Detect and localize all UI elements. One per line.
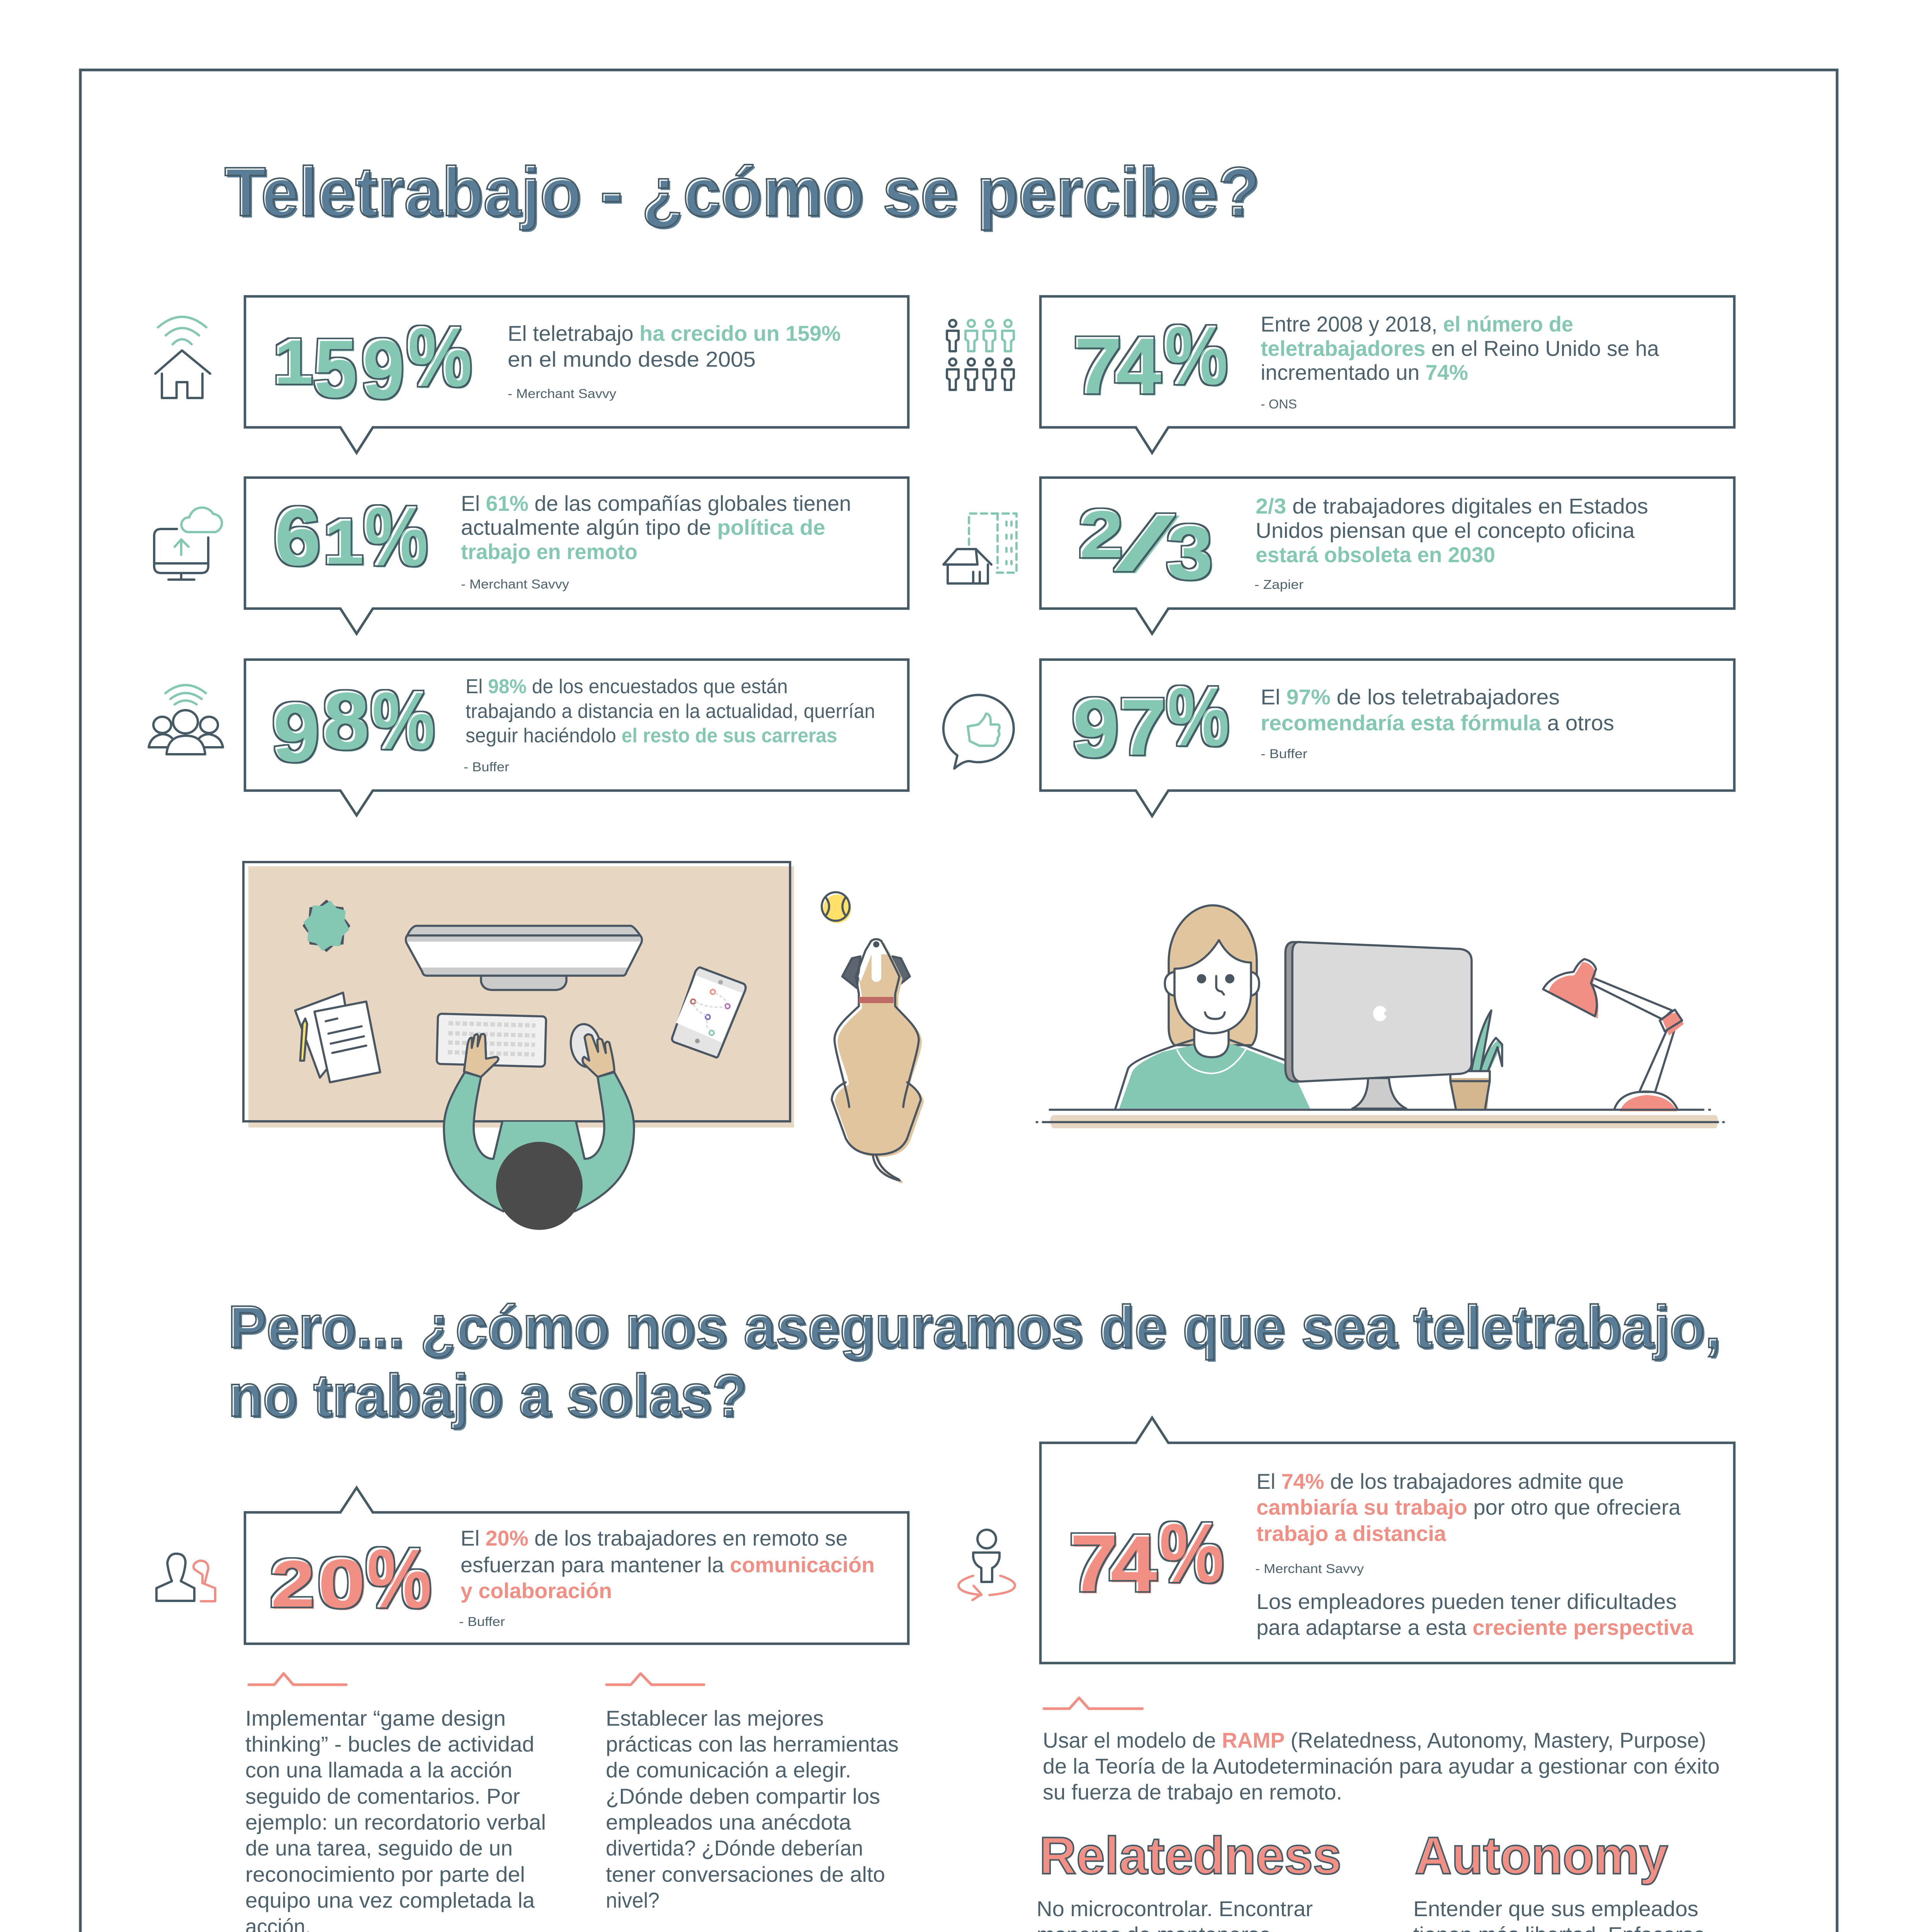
text block: trabajo en remoto — [461, 539, 637, 564]
face — [1175, 940, 1251, 1033]
stat: 159%: 9 — [364, 324, 406, 417]
text block: 2/3 de trabajadores digitales en Estados — [1256, 494, 1648, 518]
neck — [1194, 1028, 1229, 1057]
stat: 97%: 9 — [1074, 684, 1120, 776]
text block — [508, 321, 841, 401]
stat: 97%: 9 — [1072, 682, 1118, 774]
text block: Unidos piensan que el concepto oficina — [1256, 518, 1635, 543]
text block — [464, 675, 875, 774]
text block: seguir haciéndolo el resto de sus carreras — [466, 724, 837, 747]
block: Relatedness: Relatedness — [1039, 1826, 1341, 1885]
panel: 74% cambiaría — [1040, 1418, 1734, 1663]
stat: 98%: 8 — [322, 675, 369, 765]
text block — [1261, 312, 1659, 411]
tablet — [672, 968, 746, 1058]
title: Teletrabajo - ¿cómo se percibe? — [224, 153, 1260, 231]
text block: game design: de una tarea, seguido de un — [245, 1836, 513, 1860]
stat: 61%: 6 — [275, 492, 322, 583]
text block: trabajo a distancia — [1256, 1521, 1446, 1546]
panel: 61% — [245, 478, 908, 634]
text block: game design: con una llamada a la acción — [245, 1758, 512, 1782]
stat: 61% — [274, 489, 429, 584]
text block: El 97% de los teletrabajadores — [1261, 685, 1560, 709]
stat: 159%: 9 — [362, 322, 404, 415]
text block: mejores prácticas: ¿Dónde deben compartir los — [606, 1784, 880, 1808]
stat: 20%: % — [368, 1533, 433, 1626]
stat: 74%: 4 — [1115, 321, 1161, 410]
icon: cloud upload monitor — [154, 508, 222, 580]
text block: mejores prácticas: divertida? ¿Dónde deberían — [606, 1836, 863, 1860]
heading: section two — [228, 1293, 1723, 1431]
ears — [1165, 972, 1259, 996]
torso — [1115, 1039, 1310, 1109]
icon: group of people — [947, 320, 1014, 390]
text block: - Buffer — [1261, 747, 1307, 761]
stat: 97% — [1072, 669, 1231, 776]
stat: 74% — [1073, 309, 1229, 412]
stat: 61%: 1 — [325, 508, 365, 578]
stat: 159%: 1 — [273, 326, 313, 396]
stat: 74%: 4 — [1117, 323, 1163, 412]
text block: recomendaría esta fórmula a otros — [1261, 711, 1614, 735]
stat: 74%: 7 — [1073, 321, 1122, 410]
text block: RAMP intro — [1043, 1728, 1720, 1804]
text block: game design: equipo una vez completada la — [245, 1888, 535, 1912]
stat: 74%: 7 — [1069, 1517, 1117, 1608]
block: Autonomy — [1413, 1826, 1705, 1932]
text block: mejores prácticas: nivel? — [606, 1888, 659, 1912]
icon: thumbs up bubble — [943, 695, 1014, 769]
stat: 98%: % — [373, 676, 436, 767]
stat: 98%: 8 — [324, 677, 371, 767]
stat: 159%: 1 — [275, 328, 314, 398]
text block: game design: thinking” - bucles de actividad — [245, 1732, 534, 1756]
text block: - Merchant Savvy — [508, 386, 617, 401]
hair — [1169, 905, 1257, 1045]
stat: 2/3: 2 — [1081, 498, 1125, 573]
icon: house and office — [943, 514, 1016, 583]
keyboard — [437, 1014, 546, 1067]
stat: 98%: % — [371, 674, 434, 765]
stat: 2/3: 2 — [1079, 496, 1123, 571]
block: Autonomy: Entender que sus empleados — [1413, 1896, 1698, 1921]
text block: para adaptarse a esta creciente perspectiva — [1256, 1615, 1694, 1639]
plant pot — [1450, 1010, 1502, 1109]
text block: El 74% de los trabajadores admite que — [1256, 1469, 1624, 1493]
text block: - Buffer — [464, 760, 509, 774]
text block: game design: seguido de comentarios. Por — [245, 1784, 520, 1808]
text block: El teletrabajo ha crecido un 159% — [508, 321, 841, 345]
text block — [1255, 1469, 1694, 1639]
text block: RAMP intro: de la Teoría de la Autodeterminación para ayudar a gestionar con éxito — [1043, 1754, 1720, 1778]
text block: trabajando a distancia en la actualidad, querrían — [466, 700, 875, 723]
text block: - ONS — [1261, 397, 1297, 411]
panel: 2/3 — [1040, 478, 1734, 634]
illustration: desk from above with dog — [243, 862, 924, 1230]
icon: wifi house — [155, 317, 210, 398]
stat: 20%: 0 — [317, 1544, 365, 1622]
stat: 98%: 9 — [274, 688, 321, 780]
stat: 74%: % — [1158, 1505, 1223, 1599]
stat: 20%: 0 — [319, 1546, 367, 1624]
text block: RAMP intro: su fuerza de trabajo en remoto. — [1043, 1780, 1342, 1804]
panel: 159% — [245, 296, 908, 453]
stat: 159% — [273, 310, 473, 417]
stat: 98% — [272, 674, 436, 780]
lamp — [1543, 959, 1684, 1111]
text block: incrementado un 74% — [1261, 360, 1468, 384]
stat: 20% — [270, 1531, 433, 1626]
table — [1037, 1110, 1724, 1128]
stat: 97%: % — [1168, 671, 1231, 764]
person from above — [444, 1034, 634, 1230]
block: Autonomy: Autonomy — [1415, 1826, 1668, 1885]
stat: 2/3: / — [1117, 503, 1176, 588]
text block: teletrabajadores en el Reino Unido se ha — [1261, 336, 1659, 361]
text block: RAMP intro: Usar el modelo de RAMP (Relatedness, Autonomy, Mastery, Purpose) — [1043, 1728, 1706, 1752]
stat: 74%: 7 — [1075, 323, 1124, 412]
text block: mejores prácticas: prácticas con las herramientas — [606, 1732, 899, 1756]
icon: person with rotation arrows — [959, 1530, 1015, 1600]
stat: 74%: % — [1164, 309, 1227, 401]
stat: 2/3: 3 — [1168, 511, 1214, 596]
text block — [461, 491, 851, 591]
stat: 74%: % — [1166, 311, 1229, 403]
text block: mejores prácticas — [606, 1706, 899, 1912]
stat: 61%: % — [364, 489, 427, 582]
monitor — [406, 926, 642, 990]
block: Relatedness: No microcontrolar. Encontrar — [1037, 1896, 1313, 1921]
title: Teletrabajo - ¿cómo se percibe? — [226, 155, 1261, 233]
text block: - Merchant Savvy — [461, 577, 569, 591]
text block: El 20% de los trabajadores en remoto se — [461, 1526, 848, 1550]
stat: 97%: 7 — [1121, 684, 1168, 773]
panel: 20% — [245, 1488, 908, 1644]
text block: esfuerzan para mantener la comunicación — [461, 1553, 875, 1577]
plant — [299, 897, 354, 955]
stat: 97%: % — [1166, 669, 1229, 762]
text block — [1254, 494, 1648, 592]
stat: 98%: 9 — [272, 686, 319, 778]
pulse divider — [607, 1673, 704, 1685]
tennis ball — [822, 892, 851, 923]
stat: 74%: 4 — [1110, 1519, 1156, 1607]
text block: Los empleadores pueden tener dificultades — [1256, 1589, 1677, 1614]
text block: mejores prácticas: tener conversaciones de alto — [606, 1862, 885, 1886]
stat: 159%: 5 — [315, 324, 359, 415]
monitor — [1285, 942, 1472, 1082]
text block: game design: Implementar “game design — [245, 1706, 506, 1730]
text block: - Zapier — [1254, 577, 1304, 592]
text block: game design: reconocimiento por parte del — [245, 1862, 525, 1886]
papers and pencil — [295, 993, 380, 1082]
stat: 20%: % — [366, 1531, 431, 1624]
stat: 97%: 7 — [1119, 682, 1166, 771]
text block: en el mundo desde 2005 — [508, 347, 756, 371]
stat: 159%: 5 — [313, 322, 357, 413]
icon: two people — [156, 1554, 215, 1601]
stat: 61%: 1 — [323, 506, 363, 577]
monitor stand — [1352, 1078, 1406, 1109]
stat: 74%: % — [1160, 1507, 1225, 1601]
text block: mejores prácticas: empleados una anécdota — [606, 1810, 852, 1834]
text block: game design: ejemplo: un recordatorio verbal — [245, 1810, 546, 1834]
text block: mejores prácticas: Establecer las mejores — [606, 1706, 824, 1730]
stat: 74%: 7 — [1071, 1519, 1119, 1610]
pulse divider — [249, 1673, 346, 1685]
stat: 61%: % — [365, 491, 429, 584]
stat: 20%: 2 — [270, 1546, 314, 1620]
block: Relatedness — [1037, 1826, 1342, 1932]
text block: - Merchant Savvy — [1255, 1561, 1364, 1576]
text block — [1261, 685, 1614, 761]
text block: Entre 2008 y 2018, el número de — [1261, 312, 1573, 336]
text block: El 61% de las compañías globales tienen — [461, 491, 851, 515]
block: Relatedness: Relatedness — [1040, 1827, 1342, 1886]
heading: section two: Pero... ¿cómo nos aseguramos de que sea teletrabajo, — [230, 1295, 1723, 1362]
panel: 74% teletrabajadores — [1040, 296, 1734, 453]
text block: estará obsoleta en 2030 — [1256, 543, 1495, 567]
panel: 98% — [245, 660, 908, 815]
text block: - Buffer — [459, 1614, 505, 1629]
text block: El 98% de los encuestados que están — [466, 675, 788, 698]
text block: actualmente algún tipo de política de — [461, 515, 825, 539]
dog — [832, 939, 924, 1182]
stat: 2/3: 3 — [1166, 509, 1212, 594]
stat: 2/3 — [1079, 496, 1214, 596]
stat: 159%: % — [409, 311, 473, 405]
text block: cambiaría su trabajo por otro que ofreciera — [1256, 1495, 1681, 1519]
stat: 20%: 2 — [272, 1548, 316, 1622]
text block: y colaboración — [461, 1578, 612, 1603]
text block: mejores prácticas: de comunicación a elegir. — [606, 1758, 851, 1782]
pulse divider — [1044, 1698, 1142, 1709]
stat: 159%: % — [407, 310, 471, 403]
icon: remote team — [149, 685, 223, 754]
heading: section two: Pero... ¿cómo nos aseguramos de que sea teletrabajo, — [228, 1293, 1721, 1360]
text block: game design — [245, 1706, 546, 1932]
stat: 74% — [1069, 1505, 1225, 1610]
text block — [459, 1526, 875, 1629]
heading: section two: no trabajo a solas? — [230, 1364, 749, 1431]
heading: section two: no trabajo a solas? — [228, 1362, 747, 1429]
illustration: person at desk with computer and lamp — [1037, 905, 1724, 1128]
panel: 97% — [1040, 660, 1734, 816]
block: Autonomy: Autonomy — [1416, 1827, 1669, 1886]
stat: 2/3: / — [1115, 501, 1175, 586]
mouse — [568, 1022, 604, 1070]
stat: 74%: 4 — [1112, 1520, 1158, 1609]
stat: 61%: 6 — [274, 490, 320, 582]
